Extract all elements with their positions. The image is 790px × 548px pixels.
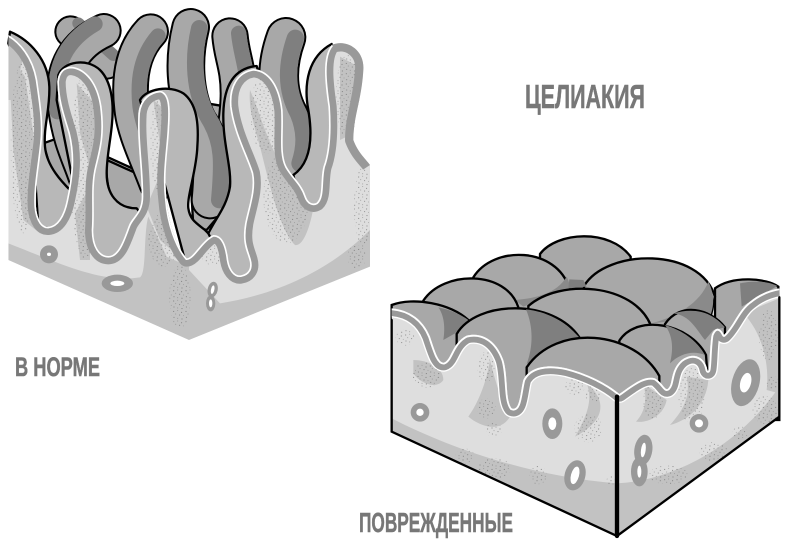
dome: center: [528, 289, 651, 420]
panel: damaged flattened villi block: [380, 236, 787, 540]
dome: left: [423, 278, 518, 420]
ring: figure eight: [206, 281, 219, 311]
back faces of front villi: [8, 32, 337, 283]
back villus B: [56, 24, 104, 177]
dome: back left: [473, 255, 569, 353]
dome: left edge wedge: [392, 301, 468, 420]
ring: center: [542, 408, 562, 439]
shaded connective tissue: [392, 298, 779, 536]
dome shade: right edge wedge: [740, 282, 777, 307]
back villus A: [71, 23, 113, 63]
block edge outlines: [392, 297, 779, 536]
dome: front: [527, 338, 659, 453]
dome: gap between domes: [568, 279, 587, 288]
tissue body: [8, 35, 370, 340]
dome shade: left edge wedge: [438, 307, 468, 340]
epithelium gray band: [8, 35, 370, 275]
dome: back: [540, 236, 631, 353]
lower tissue plugs: [43, 103, 230, 230]
dome: front right small: [619, 325, 713, 453]
epithelium white line: [8, 35, 332, 275]
dome: right edge wedge: [715, 279, 779, 420]
back villus C: [131, 32, 164, 183]
dome shade: right large: [652, 282, 713, 323]
cell rings: [411, 356, 765, 493]
stipple texture: [396, 310, 779, 485]
tissue body: [380, 280, 787, 540]
cell rings: [40, 245, 219, 311]
outer white halo: [392, 288, 779, 409]
back villi: [43, 23, 304, 230]
epithelium white line: [392, 288, 779, 409]
ring: large right: [726, 356, 765, 409]
ring: lower center: [561, 458, 589, 493]
flattened domes: [392, 236, 779, 453]
panel: normal intestinal villi block: [0, 0, 373, 347]
label: normal: В НОРМЕ: [15, 352, 100, 382]
back villus F: [279, 37, 304, 167]
label: damaged: ПОВРЕЖДЕННЫЕ: [359, 507, 513, 538]
dome: front left: [457, 308, 579, 453]
ring: right small: [690, 414, 708, 433]
dome: right large: [584, 258, 715, 420]
ring: flat oval: [102, 275, 133, 292]
stipple texture: [11, 53, 373, 328]
shaded connective tissue: [8, 43, 370, 340]
ring: left small: [40, 245, 58, 263]
ring: left small: [411, 403, 429, 422]
epithelium gray band: [392, 288, 779, 409]
title: ЦЕЛИАКИЯ: [525, 78, 645, 115]
ring: figure eight: [631, 434, 654, 486]
back villus E: [230, 33, 247, 147]
dome shade: back left: [515, 277, 570, 307]
dome shade: front left: [526, 309, 579, 364]
back villus D: [186, 27, 221, 200]
dome: right small: [665, 310, 725, 420]
dome shade: front right small: [665, 325, 705, 363]
dome shade: right small: [673, 311, 725, 340]
